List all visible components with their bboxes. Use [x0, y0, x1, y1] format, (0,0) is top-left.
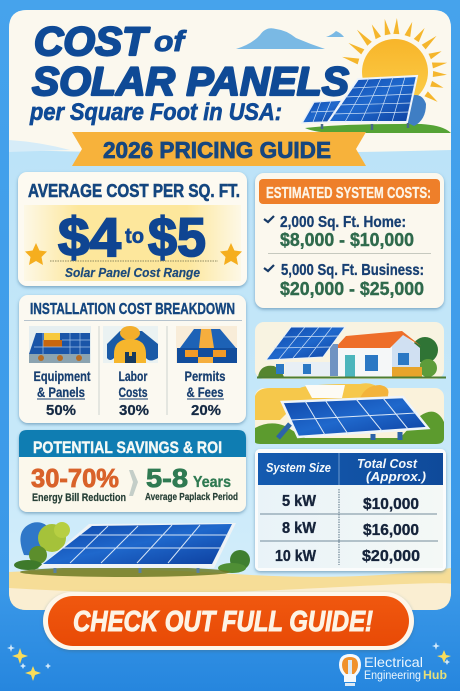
row: 10 kW: 10 kW: [275, 548, 316, 565]
icon: light bulb: [339, 654, 361, 686]
title: per Square Foot in USA:: [29, 99, 282, 126]
panel: installation cost breakdown: [19, 295, 246, 423]
rooftop solar panel: [266, 327, 345, 360]
icon: check: [264, 265, 274, 271]
bushes: [14, 522, 250, 573]
icon: permits: [176, 326, 237, 363]
panel: house illustration: [255, 322, 446, 379]
panel: solar panel in field illustration: [255, 383, 444, 444]
heading: estimated system costs: [259, 179, 440, 204]
row: 10 kW: $20,000: [362, 548, 420, 565]
logo: electrical engineering hub: Hub: [423, 670, 447, 682]
title: SOLAR PANELS: [32, 60, 349, 104]
icon: equipment panels: [29, 326, 91, 363]
price highlight band: [24, 205, 241, 281]
row: 8 kW: 8 kW: [282, 520, 316, 537]
tilted panel: [282, 397, 428, 437]
label: labor: 30%: [119, 402, 149, 419]
price range: to: [125, 225, 144, 248]
business cost: 5,000 Sq. Ft. Business:: [281, 262, 424, 279]
stat: bill reduction: [31, 463, 126, 504]
label: permits: Permits: [184, 369, 226, 384]
label: permits: 20%: [191, 402, 221, 419]
caption: Solar Panel Cost Range: [65, 265, 200, 280]
stat: payback period: Years: [193, 474, 231, 491]
table header: [258, 453, 443, 485]
house: [258, 331, 438, 377]
business cost: $20,000 - $25,000: [280, 279, 424, 299]
panel: estimated system costs: [255, 173, 444, 308]
label: labor: [118, 369, 149, 419]
call to action button: [43, 592, 414, 650]
ribbon: 2026 pricing guide: 2026 PRICING GUIDE: [103, 137, 331, 163]
row: 5 kW: [282, 493, 419, 513]
price range: $5: [148, 206, 206, 268]
label: labor: Costs: [118, 385, 148, 400]
logo: electrical engineering hub: Electrical: [364, 654, 423, 670]
panel: system size table: [255, 449, 446, 571]
label: equipment: Equipment: [34, 369, 91, 384]
logo: electrical engineering hub: Engineering: [364, 670, 421, 682]
heading: potential savings: POTENTIAL SAVINGS & ROI: [33, 438, 222, 457]
call to action button: CHECK OUT FULL GUIDE!: [73, 606, 373, 638]
row: 8 kW: [282, 520, 419, 539]
label: labor: Labor: [118, 369, 148, 384]
label: equipment: 50%: [46, 402, 76, 419]
label: permits: [184, 369, 226, 419]
sparkles right: [432, 642, 451, 665]
table header: (Approx.): [366, 470, 426, 484]
label: equipment: & Panels: [37, 385, 85, 400]
stat: payback period: 5-8: [146, 463, 188, 493]
table header: System Size: [266, 461, 331, 475]
home cost: $8,000 - $10,000: [280, 230, 414, 250]
sand highlight: [9, 583, 451, 610]
icon: labor: [103, 326, 158, 363]
header illustration: clouds: [236, 28, 344, 49]
heading: potential savings: [19, 430, 246, 457]
panel: potential savings and ROI: [19, 430, 246, 512]
icon: sun with rays: [341, 18, 448, 105]
icon: star left: [25, 243, 47, 265]
icon: star right: [220, 243, 242, 265]
label: equipment: [34, 369, 91, 419]
home cost: 2,000 Sq. Ft. Home:: [280, 214, 406, 231]
table header: Total Cost: [357, 457, 418, 471]
row: 5 kW: 5 kW: [282, 493, 316, 510]
panel: [38, 523, 236, 568]
stat: payback period: [145, 463, 238, 503]
sparkles left: [7, 644, 51, 681]
icon: divider arrow: [129, 470, 138, 496]
icon: check: [264, 216, 274, 222]
title: of: [154, 26, 188, 58]
stat: bill reduction: Energy Bill Reduction: [32, 492, 126, 504]
icon: header solar panels: [302, 76, 451, 133]
stat: payback period: Average Paplack Period: [145, 491, 238, 503]
stat: bill reduction: 30-70%: [31, 463, 119, 493]
label: permits: & Fees: [186, 385, 224, 400]
heading: installation: INSTALLATION COST BREAKDOWN: [30, 301, 235, 318]
price range: $4: [58, 206, 121, 268]
blue blob: [20, 522, 50, 556]
logo: electrical engineering hub: [339, 654, 447, 686]
title: COST: [34, 20, 151, 64]
panel: sand ground: [9, 568, 451, 610]
row: 5 kW: $10,000: [363, 496, 419, 513]
panel: average cost per sq ft: [18, 172, 247, 286]
heading: average cost: AVERAGE COST PER SQ. FT.: [28, 180, 240, 201]
home cost: [280, 214, 414, 250]
title: [29, 20, 349, 126]
row: 10 kW: [275, 548, 420, 565]
bottom solar panel illustration: [14, 522, 250, 577]
ribbon: 2026 pricing guide: [72, 132, 366, 166]
row: 8 kW: $16,000: [363, 522, 419, 539]
price range: [58, 206, 206, 268]
business cost: [280, 262, 424, 299]
